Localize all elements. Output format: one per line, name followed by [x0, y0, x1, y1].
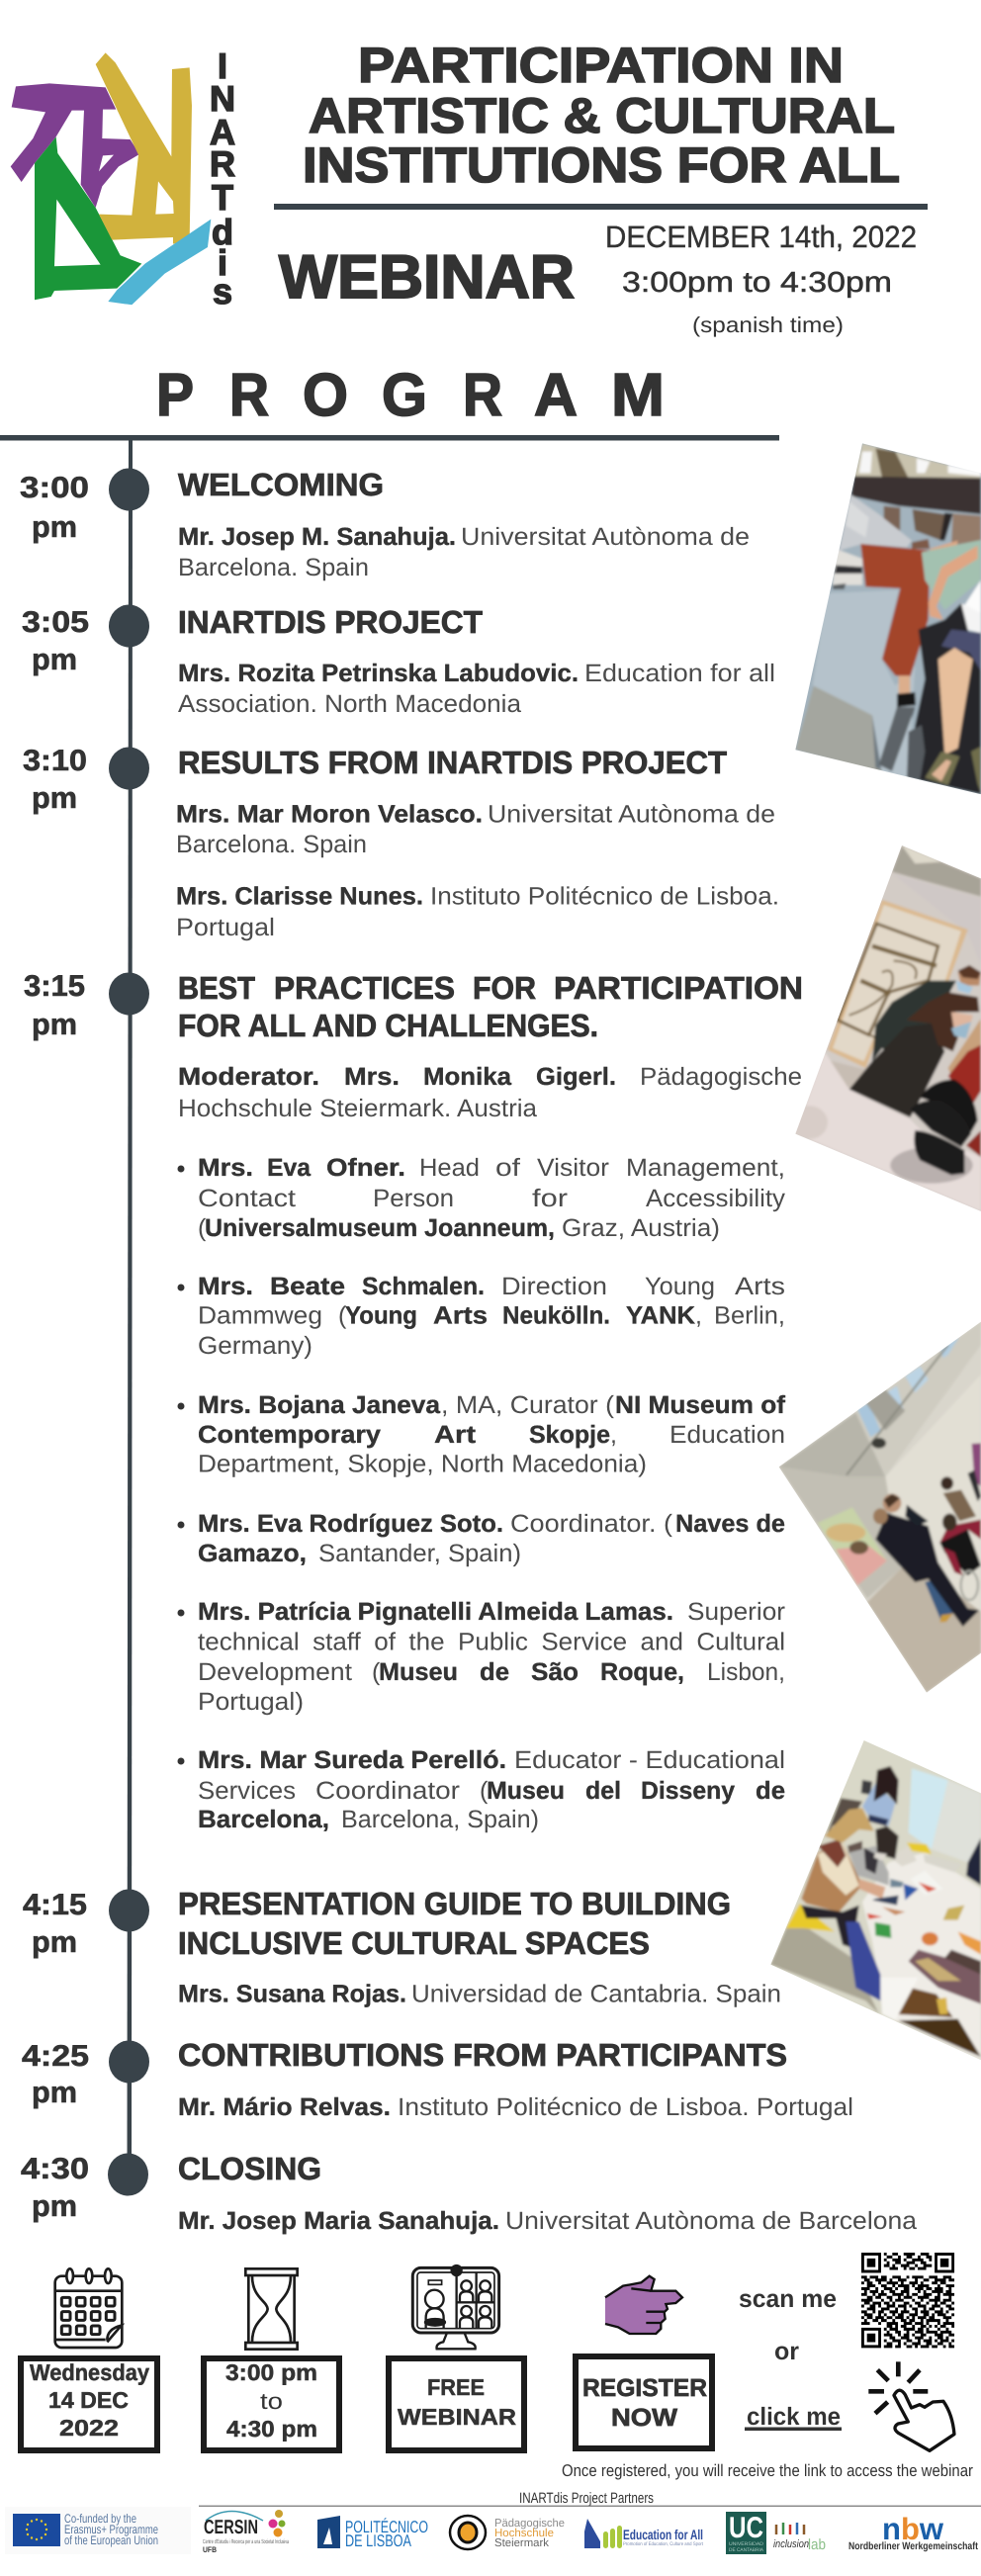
agenda item: results: Barcelona. Spain: [176, 831, 367, 858]
speaker: Eva Ofner: Mrs.: [198, 1154, 253, 1182]
timeline node and time 3:05: [22, 605, 149, 676]
agenda item: presentation guide: Mrs. Susana Rojas.: [178, 1980, 406, 2007]
logo: Education for All: [584, 2519, 704, 2548]
webinar heading: WEBINAR: [279, 243, 575, 311]
speaker: Beate Schmalen: Young: [645, 1273, 715, 1300]
partners heading: INARTdis Project Partners: [519, 2490, 654, 2507]
program heading: P: [156, 361, 194, 428]
speaker: Eva Rodríguez Soto: Coordinator. (: [510, 1510, 673, 1538]
info box: register now: [576, 2356, 712, 2448]
call to action: scan me / or / click me: click me: [747, 2403, 841, 2431]
info box: time: 4:30 pm: [226, 2416, 317, 2442]
speaker: Beate Schmalen: Schmalen.: [362, 1273, 485, 1300]
timeline node and time 3:00: pm: [32, 511, 77, 544]
info box: date: Wednesday: [30, 2359, 149, 2385]
speaker: Beate Schmalen: Germany): [198, 1332, 312, 1360]
speaker: Beate Schmalen: ,: [695, 1301, 702, 1329]
logo: Politécnico de Lisboa: POLITÉCNICO: [345, 2518, 428, 2536]
speaker: Eva Ofner: of: [495, 1154, 520, 1182]
agenda item: best practices heading and moderator: Gigerl.: [536, 1063, 616, 1091]
logo wordmark: INARTdis vertical: [210, 45, 235, 311]
logo wordmark: INARTdis vertical: T: [212, 177, 233, 218]
agenda item: presentation guide: INCLUSIVE CULTURAL SPACES: [178, 1925, 650, 1961]
logo wordmark: INARTdis vertical: A: [210, 112, 235, 152]
program heading: [156, 361, 665, 428]
icon: calendar: [55, 2268, 122, 2348]
agenda item: presentation guide: [178, 1886, 781, 2007]
agenda item: INARTdis project: [178, 604, 775, 718]
speaker: Eva Ofner: Contact: [198, 1185, 296, 1212]
timeline node and time 4:15: [23, 1889, 149, 1959]
speaker: Beate Schmalen: Neukölln.: [502, 1301, 610, 1329]
logo: CERSIN: Centre d'Estudis i Recerca per a una Societat Inclusiva: [203, 2538, 289, 2545]
agenda item: welcoming: WELCOMING: [178, 467, 384, 502]
QR code: [861, 2254, 954, 2347]
agenda item: results: [176, 745, 779, 941]
speaker: Patrícia Pignatelli Almeida Lamas: Superior: [687, 1598, 785, 1626]
speaker: Bojana Janeva: , MA, Curator (: [441, 1391, 615, 1419]
agenda item: best practices heading and moderator: Hochschule Steiermark. Austria: [178, 1095, 537, 1122]
speaker: Patrícia Pignatelli Almeida Lamas: Portugal): [198, 1688, 304, 1716]
timeline node and time 3:05: 3:05: [22, 606, 89, 639]
logo: Politécnico de Lisboa: [317, 2516, 428, 2550]
speaker: Mar Sureda Perelló: Educator - Educational: [514, 1746, 785, 1774]
speaker: Bojana Janeva: Contemporary: [198, 1421, 381, 1449]
speaker: Eva Ofner: (: [198, 1214, 207, 1242]
logo: INARTdis coloured mark: [11, 52, 211, 305]
speaker: Bojana Janeva: Education: [669, 1421, 785, 1449]
logo: Universidad de Cantabria: UC: [729, 2512, 763, 2544]
logo: Education for All: Education for All: [623, 2527, 703, 2542]
agenda item: closing: CLOSING: [178, 2151, 321, 2186]
timeline node and time 4:30: pm: [32, 2190, 77, 2223]
speaker: Beate Schmalen: Arts: [433, 1301, 488, 1329]
agenda item: best practices heading and moderator: Monika: [423, 1063, 512, 1091]
info box: time: to: [260, 2388, 283, 2414]
speaker: Beate Schmalen: Beate: [270, 1273, 345, 1300]
timeline node and time 3:15: [24, 970, 149, 1041]
timeline node and time 4:30: [21, 2153, 148, 2223]
speaker: Eva Rodríguez Soto: Mrs. Eva Rodríguez Soto.: [198, 1510, 503, 1538]
agenda item: results: Universitat Autònoma de: [488, 801, 775, 829]
date and time block: 3:00pm to 4:30pm: [622, 267, 892, 299]
speaker: Beate Schmalen: Mrs.: [198, 1273, 253, 1300]
timeline node and time 4:25: [22, 2040, 149, 2109]
timeline node and time 3:05: pm: [32, 644, 77, 676]
speaker: Patrícia Pignatelli Almeida Lamas: Mrs. Patrícia Pignatelli Almeida Lamas.: [198, 1598, 673, 1626]
logo: Pädagogische Hochschule Steiermark: Pädagogische: [494, 2518, 565, 2530]
logo: Politécnico de Lisboa: DE LISBOA: [345, 2532, 411, 2550]
agenda item: presentation guide: PRESENTATION GUIDE TO BUILDING: [178, 1886, 731, 1921]
speaker: Eva Rodríguez Soto: Naves de: [675, 1510, 785, 1538]
timeline node and time 3:10: pm: [32, 782, 77, 815]
agenda item: welcoming: Mr. Josep M. Sanahuja.: [178, 523, 456, 551]
timeline node and time 3:15: pm: [32, 1009, 77, 1041]
agenda item: presentation guide: Universidad de Cantabria. Spain: [411, 1980, 781, 2007]
speaker: Beate Schmalen: Young: [345, 1301, 417, 1329]
agenda item: results: Mrs. Mar Moron Velasco.: [176, 801, 483, 829]
agenda item: INARTdis project: Association. North Macedonia: [178, 690, 521, 718]
speaker: Eva Ofner: [178, 1154, 786, 1242]
logo: nbw Nordberliner Werkgemeinschaft: nbw: [882, 2512, 944, 2546]
timeline node and time 3:10: 3:10: [23, 745, 87, 777]
agenda item: contributions: Mr. Mário Relvas.: [178, 2093, 391, 2121]
agenda item: welcoming: Barcelona. Spain: [178, 554, 369, 581]
speaker: Beate Schmalen: YANK: [626, 1301, 695, 1329]
timeline spine: [127, 440, 133, 2175]
agenda item: welcoming: Universitat Autònoma de: [461, 523, 750, 551]
agenda item: closing: Mr. Josep Maria Sanahuja.: [178, 2207, 499, 2235]
logo: inclusion lab: inclusion: [773, 2538, 809, 2550]
date and time block: [605, 220, 917, 337]
speaker: Beate Schmalen: Arts: [735, 1273, 785, 1300]
speaker: Mar Sureda Perelló: Mrs. Mar Sureda Perelló.: [198, 1746, 506, 1774]
info box: date: [21, 2358, 157, 2450]
icon: clicking hand: [868, 2361, 954, 2450]
timeline node and time 4:30: 4:30: [21, 2153, 89, 2185]
speaker: Patrícia Pignatelli Almeida Lamas: de: [480, 1658, 509, 1686]
speaker: Mar Sureda Perelló: Coordinator: [315, 1777, 460, 1805]
speaker: Beate Schmalen: Dammweg: [198, 1301, 322, 1329]
agenda item: best practices heading and moderator: PRACTICES: [274, 970, 455, 1006]
agenda item: best practices heading and moderator: Moderator.: [178, 1063, 319, 1091]
speaker: Mar Sureda Perelló: Barcelona, Spain): [341, 1806, 539, 1833]
speaker: Bojana Janeva: NI Museum of: [615, 1391, 786, 1419]
agenda item: contributions: CONTRIBUTIONS FROM PARTICIPANTS: [178, 2037, 787, 2073]
program heading: G: [382, 361, 427, 428]
photo: workshop around a table: [763, 1731, 981, 2064]
program heading: R: [229, 361, 269, 428]
title: [303, 38, 900, 193]
agenda item: INARTdis project: Mrs. Rozita Petrinska Labudovic.: [178, 660, 579, 687]
logo wordmark: INARTdis vertical: I: [218, 45, 227, 86]
logo wordmark: INARTdis vertical: i: [218, 242, 227, 283]
speaker: Mar Sureda Perelló: de: [756, 1777, 785, 1805]
timeline node and time 4:25: pm: [32, 2077, 77, 2109]
speaker: Beate Schmalen: (: [338, 1301, 347, 1329]
speaker: Mar Sureda Perelló: del: [585, 1777, 621, 1805]
program heading: O: [303, 361, 348, 428]
agenda item: results: Mrs. Clarisse Nunes.: [176, 882, 423, 910]
logo: Universidad de Cantabria: UNIVERSIDAD: [729, 2541, 763, 2547]
info box: free webinar: FREE: [427, 2374, 485, 2400]
agenda item: best practices heading and moderator: PARTICIPATION: [554, 970, 803, 1006]
speaker: Eva Ofner: Universalmuseum Joanneum,: [205, 1214, 555, 1242]
timeline node and time 3:00: 3:00: [20, 472, 89, 504]
speaker: Mar Sureda Perelló: [178, 1746, 785, 1833]
logo: Education for All: Promotion of Education, Culture and Sport: [623, 2541, 704, 2547]
speaker: Mar Sureda Perelló: Museu: [487, 1777, 565, 1805]
logo: Erasmus+ co-funding: Erasmus+ Programme: [64, 2523, 158, 2536]
title: ARTISTIC & CULTURAL: [309, 88, 895, 143]
logo: Pädagogische Hochschule Steiermark: Steiermark: [494, 2537, 549, 2549]
photo: visitors and black sculpture: [783, 841, 981, 1213]
title: PARTICIPATION IN: [358, 38, 844, 93]
logo: inclusion lab: [773, 2523, 826, 2553]
speaker: Patrícia Pignatelli Almeida Lamas: (: [372, 1658, 381, 1686]
logo: Erasmus+ co-funding: [5, 2507, 191, 2554]
agenda item: contributions: [178, 2037, 853, 2121]
timeline node and time 3:00: [20, 469, 149, 544]
info box: free webinar: [389, 2358, 524, 2450]
speaker: Eva Ofner: Eva: [267, 1154, 312, 1182]
info box: date: 2022: [59, 2415, 119, 2441]
agenda item: best practices heading and moderator: BEST: [178, 970, 255, 1006]
logo wordmark: INARTdis vertical: d: [212, 212, 233, 252]
logo: CERSIN: [203, 2510, 289, 2554]
speaker: Bojana Janeva: Department, Skopje, North Macedonia): [198, 1450, 647, 1477]
timeline node and time 3:15: 3:15: [24, 970, 85, 1003]
agenda item: best practices heading and moderator: [178, 970, 803, 1122]
speaker: Beate Schmalen: Berlin,: [714, 1301, 785, 1329]
call to action: scan me / or / click me: or: [774, 2338, 799, 2365]
program heading: M: [611, 361, 665, 428]
speaker: Patrícia Pignatelli Almeida Lamas: [178, 1598, 785, 1716]
logo: Erasmus+ co-funding: Co-funded by the: [64, 2512, 136, 2526]
agenda item: results: Portugal: [176, 914, 275, 941]
icon: video call monitor: [412, 2265, 499, 2349]
logo: CERSIN: UFB: [203, 2545, 217, 2554]
speaker: Bojana Janeva: ,: [610, 1421, 617, 1449]
speaker: Bojana Janeva: Skopje: [529, 1421, 610, 1449]
agenda item: results: RESULTS FROM INARTDIS PROJECT: [178, 745, 727, 780]
photo: wheelchair user and dancer: [783, 435, 981, 798]
speaker: Patrícia Pignatelli Almeida Lamas: Development: [198, 1658, 352, 1686]
logo: Pädagogische Hochschule Steiermark: Hochschule: [494, 2528, 554, 2539]
agenda item: results: Instituto Politécnico de Lisboa.: [430, 882, 779, 910]
speaker: Bojana Janeva: [178, 1391, 786, 1477]
title: INSTITUTIONS FOR ALL: [303, 137, 900, 193]
timeline node and time 4:15: 4:15: [23, 1889, 87, 1921]
logo: Universidad de Cantabria: [726, 2512, 766, 2554]
speaker: Eva Ofner: Accessibility: [646, 1185, 786, 1212]
logo: nbw Nordberliner Werkgemeinschaft: [848, 2512, 978, 2552]
speaker: Mar Sureda Perelló: (: [480, 1777, 489, 1805]
logo wordmark: INARTdis vertical: s: [213, 271, 232, 311]
logo: CERSIN: CERSIN: [204, 2517, 258, 2538]
agenda item: best practices heading and moderator: FOR: [473, 970, 536, 1006]
speaker: Eva Ofner: Ofner.: [326, 1154, 405, 1182]
agenda item: best practices heading and moderator: Pädagogische: [640, 1063, 802, 1091]
agenda item: best practices heading and moderator: FOR ALL AND CHALLENGES.: [178, 1008, 598, 1043]
speaker: Eva Ofner: Head: [419, 1154, 480, 1182]
photo: group in white gallery: [773, 1315, 981, 1694]
info box: register now: NOW: [611, 2404, 677, 2432]
call to action: scan me / or / click me: scan me: [739, 2285, 837, 2313]
logo wordmark: INARTdis vertical: N: [210, 78, 235, 119]
agenda item: INARTdis project: INARTDIS PROJECT: [178, 604, 483, 640]
speaker: Eva Ofner: Person: [373, 1185, 454, 1212]
info box: time: 3:00 pm: [225, 2359, 317, 2385]
agenda item: welcoming: [178, 467, 750, 581]
program heading: R: [463, 361, 502, 428]
logo: Pädagogische Hochschule Steiermark: [450, 2516, 565, 2549]
info box: free webinar: WEBINAR: [398, 2404, 516, 2430]
speaker: Patrícia Pignatelli Almeida Lamas: São: [531, 1658, 579, 1686]
speaker: Eva Rodríguez Soto: [178, 1510, 785, 1567]
speaker: Eva Rodríguez Soto: Santander, Spain): [318, 1540, 521, 1567]
speaker: Mar Sureda Perelló: Barcelona,: [198, 1806, 329, 1833]
agenda item: closing: [178, 2151, 917, 2235]
speaker: Mar Sureda Perelló: Services: [198, 1777, 296, 1805]
date and time block: (spanish time): [692, 312, 844, 337]
agenda item: best practices heading and moderator: Mrs.: [344, 1063, 400, 1091]
logo wordmark: INARTdis vertical: R: [210, 143, 235, 184]
logo: Erasmus+ co-funding: of the European Union: [64, 2533, 158, 2547]
call to action: scan me / or / click me: [739, 2285, 842, 2431]
agenda item: closing: Universitat Autònoma de Barcelona: [505, 2207, 917, 2235]
speaker: Eva Ofner: for: [532, 1185, 568, 1212]
icon: purple pointing hand: [605, 2276, 682, 2334]
speaker: Beate Schmalen: [178, 1273, 785, 1360]
agenda item: contributions: Instituto Politécnico de Lisboa. Portugal: [398, 2093, 853, 2121]
logo: inclusion lab: lab: [808, 2536, 826, 2553]
speaker: Eva Ofner: Graz, Austria): [562, 1214, 720, 1242]
speaker: Beate Schmalen: Direction: [501, 1273, 607, 1300]
speaker: Patrícia Pignatelli Almeida Lamas: Roque,: [600, 1658, 684, 1686]
speaker: Patrícia Pignatelli Almeida Lamas: Museu: [379, 1658, 458, 1686]
speaker: Eva Ofner: Visitor: [537, 1154, 609, 1182]
speaker: Eva Rodríguez Soto: Gamazo,: [198, 1540, 307, 1567]
timeline node and time 3:10: [23, 745, 149, 815]
speaker: Patrícia Pignatelli Almeida Lamas: technical staff of the Public Service and Cultural: [198, 1628, 785, 1655]
timeline node and time 4:25: 4:25: [22, 2040, 89, 2073]
info box: date: 14 DEC: [48, 2387, 129, 2413]
speaker: Bojana Janeva: Mrs. Bojana Janeva: [198, 1391, 441, 1419]
timeline node and time 4:15: pm: [32, 1926, 77, 1959]
speaker: Eva Ofner: Management,: [626, 1154, 785, 1182]
date and time block: DECEMBER 14th, 2022: [605, 220, 917, 254]
logo: Universidad de Cantabria: DE CANTABRIA: [729, 2547, 764, 2553]
speaker: Bojana Janeva: Art: [434, 1421, 477, 1449]
agenda item: INARTdis project: Education for all: [584, 660, 775, 687]
speaker: Mar Sureda Perelló: Disseny: [641, 1777, 735, 1805]
info box: time: [204, 2358, 339, 2450]
program heading: A: [534, 361, 578, 428]
info box: register now: REGISTER: [582, 2374, 707, 2402]
icon: hourglass: [245, 2268, 298, 2350]
speaker: Patrícia Pignatelli Almeida Lamas: Lisbon,: [707, 1658, 785, 1686]
